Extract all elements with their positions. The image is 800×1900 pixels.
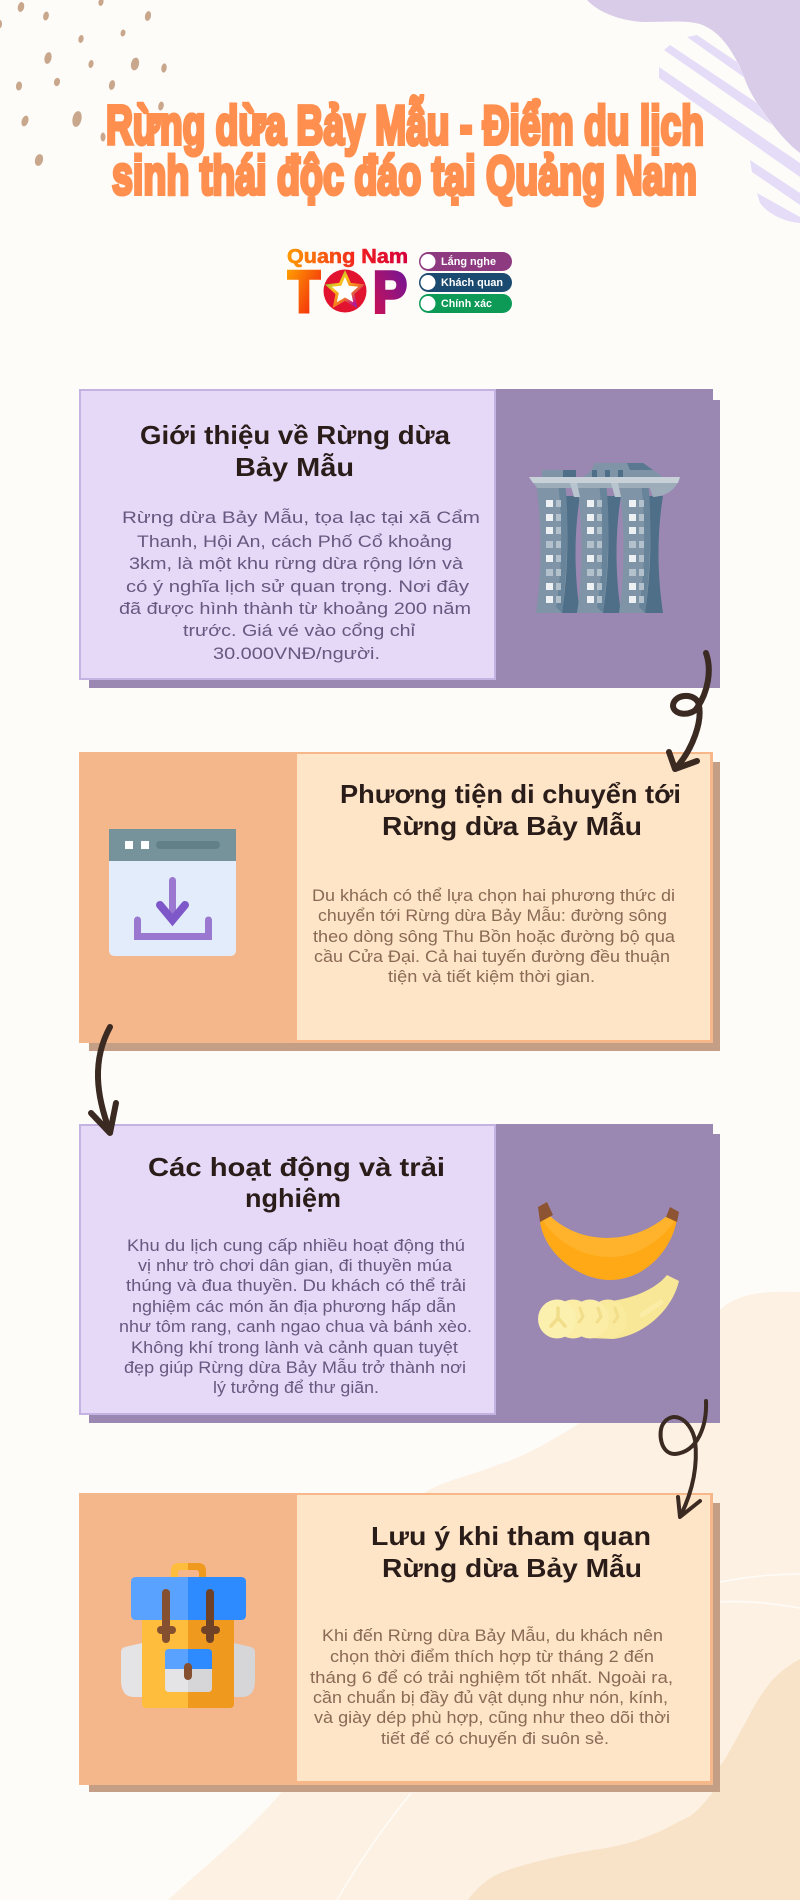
- icon: download window: [109, 829, 236, 956]
- logo wordmark: P: [373, 260, 407, 325]
- heading: introduction: Giới thiệu về Rừng dừa: [140, 420, 451, 450]
- logo pill: Chính xác: [419, 294, 512, 313]
- icon: backpack: [121, 1563, 255, 1708]
- logo pill: Khách quan: [419, 273, 512, 292]
- panel: activities: [79, 1124, 720, 1423]
- text: transport body: theo dòng sông Thu Bồn hoặc đường bộ qua: [313, 928, 676, 946]
- text: notes body: tháng 6 để có trải nghiệm tốt nhất. Ngoài ra,: [310, 1669, 673, 1687]
- logo: Quang Nam TOP: [287, 246, 512, 325]
- text: activities body: Khu du lịch cung cấp nhiều hoạt động thú: [127, 1237, 465, 1255]
- text: transport body: chuyển tới Rừng dừa Bảy Mẫu: đường sông: [318, 906, 667, 925]
- text: introduction body: trước. Giá vé vào cổng chỉ: [183, 622, 415, 640]
- background: bottom pale peach blob: [168, 1292, 800, 1900]
- logo pill: Lắng nghe: [419, 252, 512, 271]
- panel: notes: [79, 1493, 720, 1792]
- text: transport body: cầu Cửa Đại. Cả hai tuyến đường đều thuận: [314, 948, 670, 966]
- heading: introduction: [140, 420, 451, 482]
- heading: notes: Lưu ý khi tham quan: [371, 1521, 651, 1551]
- heading: activities: nghiệm: [245, 1183, 341, 1213]
- panel: transport: [79, 752, 720, 1051]
- background: scattered brown dots: [0, 0, 167, 167]
- text: activities body: [119, 1237, 472, 1397]
- text: activities body: đẹp giúp Rừng dừa Bảy Mẫu trở thành nơi: [124, 1358, 466, 1377]
- title: [106, 94, 704, 206]
- logo pill: Chính xác: Chính xác: [441, 298, 492, 310]
- text: activities body: nghiệm các món ăn địa phương hấp dẫn: [132, 1297, 456, 1316]
- text: activities body: như tôm rang, canh ngao chua và bánh xèo.: [119, 1318, 472, 1336]
- logo wordmark: T: [288, 260, 320, 325]
- icon: banana: [538, 1202, 679, 1339]
- text: introduction body: đã được hình thành từ khoảng 200 năm: [119, 600, 471, 618]
- text: activities body: vị như trò chơi dân gian, đi thuyền múa: [138, 1257, 453, 1275]
- text: transport body: tiện và tiết kiệm thời gian.: [388, 968, 595, 986]
- text: transport body: [312, 887, 676, 986]
- text: notes body: [310, 1626, 673, 1748]
- heading: notes: Rừng dừa Bảy Mẫu: [382, 1553, 642, 1583]
- text: notes body: tiết để có chuyến đi suôn sẻ.: [381, 1730, 609, 1748]
- text: activities body: lý tưởng để thư giãn.: [213, 1379, 379, 1397]
- text: notes body: chọn thời điểm thích hợp từ tháng 2 đến: [330, 1648, 654, 1666]
- heading: notes: [371, 1521, 651, 1583]
- background: top right stripes: [659, 35, 800, 223]
- text: introduction body: 30.000VNĐ/người.: [213, 645, 380, 663]
- icon: towers building: [529, 463, 680, 613]
- arrow: introduction to transport loop: [669, 653, 709, 769]
- text: introduction body: Rừng dừa Bảy Mẫu, tọa lạc tại xã Cẩm: [122, 508, 480, 527]
- heading: activities: Các hoạt động và trải: [148, 1152, 445, 1182]
- text: introduction body: 3km, là một khu rừng dừa rộng lớn và: [129, 555, 464, 573]
- heading: introduction: Bảy Mẫu: [235, 452, 354, 482]
- background: top right lilac blob: [587, 0, 800, 153]
- arrow: transport to activities: [91, 1027, 116, 1133]
- text: notes body: Khi đến Rừng dừa Bảy Mẫu, du khách nên: [322, 1626, 663, 1645]
- text: notes body: cần chuẩn bị đầy đủ vật dụng như nón, kính,: [313, 1689, 668, 1707]
- text: activities body: Không khí trong lành và cảnh quan tuyệt: [131, 1339, 458, 1357]
- logo pill: Lắng nghe: Lắng nghe: [441, 255, 496, 268]
- background: thin white curves: [337, 1574, 800, 1900]
- text: introduction body: [119, 508, 480, 663]
- text: activities body: thúng và đua thuyền. Du khách có thể trải: [126, 1277, 466, 1295]
- heading: transport: Rừng dừa Bảy Mẫu: [382, 811, 642, 841]
- logo wordmark: Quang Nam: [287, 246, 408, 268]
- background: bottom darker peach blob: [468, 1659, 800, 1900]
- text: notes body: và giày dép phù hợp, cũng như theo dõi thời: [314, 1709, 670, 1727]
- heading: transport: [340, 779, 681, 841]
- logo pill: Khách quan: Khách quan: [441, 277, 503, 289]
- heading: transport: Phương tiện di chuyển tới: [340, 779, 681, 809]
- text: introduction body: có ý nghĩa lịch sử quan trọng. Nơi đây: [126, 578, 470, 596]
- logo wordmark: [287, 246, 408, 325]
- text: introduction body: Thanh, Hội An, cách Phố Cổ khoảng: [137, 533, 452, 551]
- text: transport body: Du khách có thể lựa chọn hai phương thức di: [312, 887, 675, 905]
- panel: introduction: [79, 389, 720, 688]
- arrow: activities to notes loop: [661, 1401, 706, 1517]
- heading: activities: [148, 1152, 445, 1213]
